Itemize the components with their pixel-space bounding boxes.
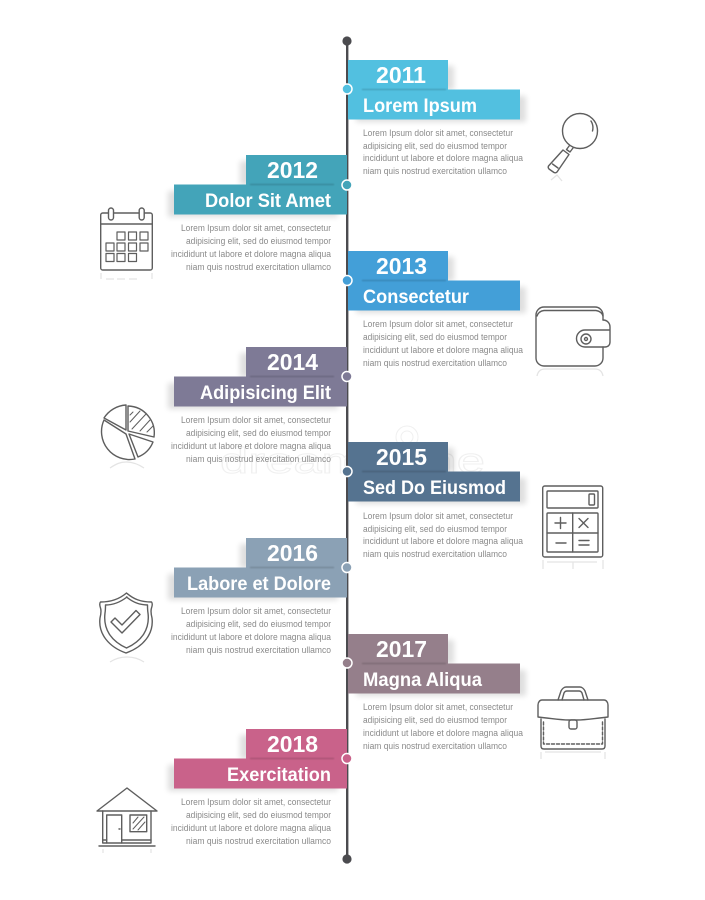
title bar 2012	[174, 184, 347, 214]
body text 2012: incididunt ut labore et dolore magna aliqua	[171, 249, 331, 259]
body text 2016: incididunt ut labore et dolore magna aliqua	[171, 632, 331, 642]
timeline axis	[342, 36, 352, 864]
year 2011: 2011	[376, 62, 426, 88]
title bar 2014	[174, 376, 347, 406]
title Labore et Dolore: Labore et Dolore	[187, 574, 331, 595]
body text 2013: adipisicing elit, sed do eiusmod tempor	[363, 332, 507, 342]
body text 2017: Lorem Ipsum dolor sit amet, consectetur	[363, 702, 513, 712]
icon: calculator	[543, 486, 603, 569]
body text 2016: adipisicing elit, sed do eiusmod tempor	[186, 619, 331, 629]
body text 2017: niam quis nostrud exercitation ullamco	[363, 741, 507, 751]
body text 2015	[363, 511, 523, 559]
item 2011	[342, 60, 526, 176]
item 2013	[342, 251, 526, 368]
item 2015	[342, 442, 526, 559]
watermark	[220, 426, 485, 481]
body text 2017: incididunt ut labore et dolore magna aliqua	[363, 728, 523, 738]
year tab 2012	[246, 155, 347, 185]
year tab 2017	[348, 634, 448, 664]
marker 2016	[342, 562, 352, 572]
body text 2014	[171, 415, 331, 464]
item 2014	[168, 347, 352, 464]
body text 2016: Lorem Ipsum dolor sit amet, consectetur	[181, 606, 331, 616]
year tab 2018	[246, 729, 347, 759]
item 2016	[168, 538, 352, 655]
year 2014: 2014	[267, 349, 318, 375]
marker 2018	[342, 754, 352, 764]
body text 2013: Lorem Ipsum dolor sit amet, consectetur	[363, 319, 513, 329]
year tab 2016	[246, 538, 347, 568]
year 2018: 2018	[267, 731, 318, 757]
title bar 2015	[348, 472, 520, 502]
title bar 2017	[348, 664, 520, 694]
body text 2015: Lorem Ipsum dolor sit amet, consectetur	[363, 511, 513, 521]
year tab 2013	[348, 251, 448, 281]
item 2017	[342, 634, 526, 751]
body text 2018: niam quis nostrud exercitation ullamco	[186, 836, 331, 846]
body text 2016	[171, 606, 331, 655]
body text 2016: niam quis nostrud exercitation ullamco	[186, 645, 331, 655]
title Consectetur: Consectetur	[363, 287, 470, 308]
body text 2013: niam quis nostrud exercitation ullamco	[363, 358, 507, 368]
body text 2017: adipisicing elit, sed do eiusmod tempor	[363, 715, 507, 725]
body text 2015: niam quis nostrud exercitation ullamco	[363, 549, 507, 559]
year tab 2011	[348, 60, 448, 90]
body text 2011: Lorem Ipsum dolor sit amet, consectetur	[363, 128, 513, 138]
icon: magnifying glass	[548, 114, 598, 181]
marker 2017	[342, 658, 352, 668]
item 2012	[168, 155, 352, 272]
title Magna Aliqua: Magna Aliqua	[363, 670, 482, 691]
year 2017: 2017	[376, 636, 427, 662]
marker 2011	[342, 84, 352, 94]
body text 2012	[171, 223, 331, 272]
body text 2018: incididunt ut labore et dolore magna aliqua	[171, 823, 331, 833]
title Dolor Sit Amet: Dolor Sit Amet	[205, 191, 332, 212]
item 2018	[168, 729, 352, 846]
year tab 2015	[348, 442, 448, 472]
icon: calendar	[101, 208, 152, 279]
body text 2012: niam quis nostrud exercitation ullamco	[186, 262, 331, 272]
body text 2013: incididunt ut labore et dolore magna aliqua	[363, 345, 523, 355]
watermark: dreamstime	[220, 440, 485, 481]
title bar 2016	[174, 568, 347, 598]
year 2013: 2013	[376, 253, 427, 279]
title Lorem Ipsum: Lorem Ipsum	[363, 96, 477, 117]
title bar 2018	[174, 758, 347, 788]
body text 2015: adipisicing elit, sed do eiusmod tempor	[363, 524, 507, 534]
body text 2012: Lorem Ipsum dolor sit amet, consectetur	[181, 223, 331, 233]
icon: house	[97, 788, 157, 853]
body text 2018: adipisicing elit, sed do eiusmod tempor	[186, 810, 331, 820]
body text 2015: incididunt ut labore et dolore magna aliqua	[363, 536, 523, 546]
title bar 2011	[348, 90, 520, 120]
body text 2011: niam quis nostrud exercitation ullamco	[363, 166, 507, 176]
year 2012: 2012	[267, 157, 318, 183]
title Adipisicing Elit: Adipisicing Elit	[200, 383, 332, 404]
year 2015: 2015	[376, 444, 427, 470]
title Exercitation: Exercitation	[227, 765, 331, 786]
marker 2015	[342, 466, 352, 476]
marker 2014	[342, 372, 352, 382]
body text 2014: niam quis nostrud exercitation ullamco	[186, 454, 331, 464]
body text 2011: incididunt ut labore et dolore magna aliqua	[363, 153, 523, 163]
body text 2011: adipisicing elit, sed do eiusmod tempor	[363, 141, 507, 151]
body text 2014: incididunt ut labore et dolore magna aliqua	[171, 441, 331, 451]
body text 2011	[363, 128, 523, 176]
marker 2013	[342, 276, 352, 286]
marker 2012	[342, 180, 352, 190]
year tab 2014	[246, 347, 347, 377]
title bar 2013	[348, 280, 520, 310]
icon: shield with check	[100, 593, 152, 662]
body text 2014: Lorem Ipsum dolor sit amet, consectetur	[181, 415, 331, 425]
body text 2013	[363, 319, 523, 368]
icon: wallet	[536, 307, 610, 376]
body text 2014: adipisicing elit, sed do eiusmod tempor	[186, 428, 331, 438]
icon: pie chart	[102, 405, 154, 468]
icon: briefcase	[538, 687, 608, 759]
body text 2018: Lorem Ipsum dolor sit amet, consectetur	[181, 797, 331, 807]
body text 2012: adipisicing elit, sed do eiusmod tempor	[186, 236, 331, 246]
title Sed Do Eiusmod: Sed Do Eiusmod	[363, 478, 506, 499]
year 2016: 2016	[267, 540, 318, 566]
body text 2017	[363, 702, 523, 751]
body text 2018	[171, 797, 331, 846]
